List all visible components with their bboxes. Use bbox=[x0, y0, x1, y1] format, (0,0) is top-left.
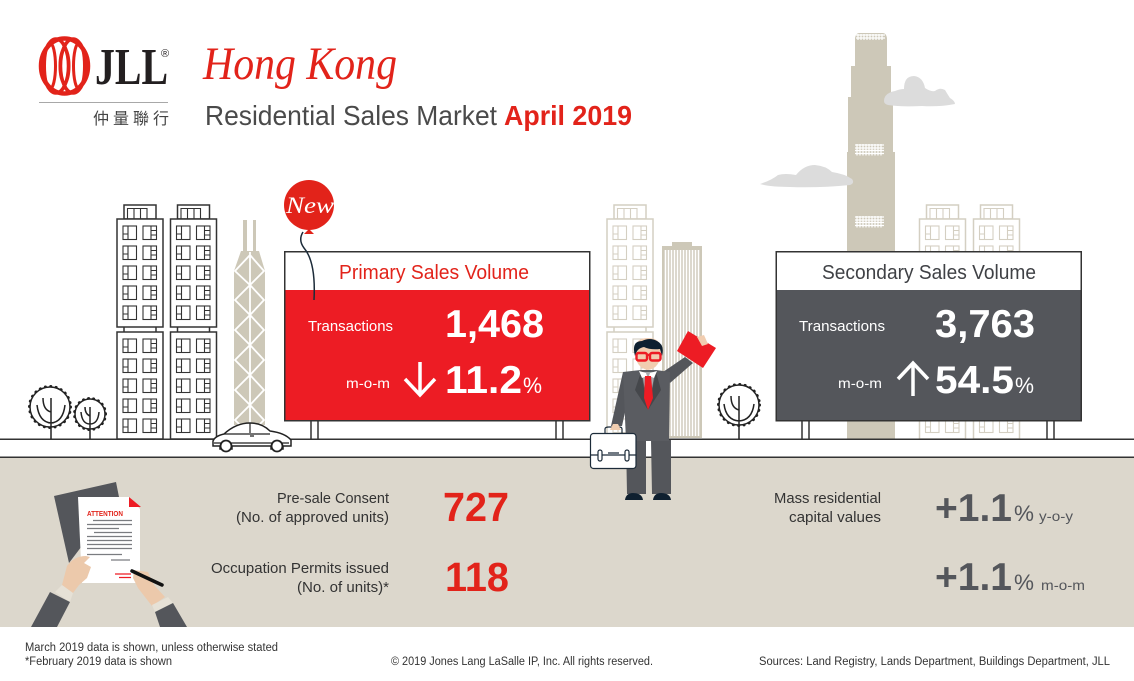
logo mark bbox=[41, 38, 88, 94]
arrow up bbox=[898, 363, 928, 396]
dark folder bbox=[54, 482, 119, 563]
balloon string bbox=[301, 232, 314, 300]
billboard posts bbox=[802, 421, 1054, 439]
tie bbox=[644, 376, 653, 410]
footer notes: March 2019 data is shown, unless otherwise stated bbox=[25, 642, 278, 654]
shirt bbox=[642, 372, 655, 410]
collar bbox=[639, 371, 657, 378]
logo wordmark: JLL bbox=[95, 39, 168, 96]
secondary heading: Secondary Sales Volume bbox=[822, 262, 1036, 284]
stat: pre-sale consent: Pre-sale Consent bbox=[277, 490, 390, 507]
primary transactions value: 1,468 bbox=[445, 303, 544, 346]
beige buildings behind the man bbox=[607, 205, 702, 439]
signature bbox=[115, 574, 131, 578]
stat: month on month capital values: m-o-m bbox=[1041, 577, 1085, 593]
sources: Sources: Land Registry, Lands Department, Buildings Department, JLL bbox=[759, 656, 1111, 668]
lapels bbox=[635, 372, 661, 410]
raised hand bbox=[697, 335, 708, 346]
illustration: signing document bbox=[31, 482, 187, 627]
footer bbox=[25, 642, 1111, 668]
bank of china tower bbox=[234, 220, 265, 428]
attention heading: ATTENTION bbox=[87, 511, 123, 518]
subtitle: April 2019 bbox=[504, 100, 632, 131]
trees bbox=[30, 384, 760, 439]
foreground apartment buildings bbox=[117, 205, 216, 439]
icon: new balloon bbox=[284, 180, 335, 300]
secondary m-o-m value: 54.5 bbox=[935, 359, 1014, 402]
beige apartment tower bbox=[607, 205, 653, 439]
cloud lower bbox=[760, 165, 853, 187]
stat: mass residential capital values: capital values bbox=[789, 509, 881, 526]
stat: pre-sale consent: (No. of approved units) bbox=[236, 509, 389, 526]
logo chinese name: 仲量聯行 bbox=[93, 110, 169, 128]
stat: pre-sale consent bbox=[236, 484, 509, 530]
stat: occupation permits bbox=[211, 554, 509, 600]
billboard posts bbox=[311, 421, 563, 439]
buildings behind secondary board bbox=[920, 205, 1020, 439]
primary transactions label: Transactions bbox=[308, 318, 393, 335]
subtitle: Residential Sales Market bbox=[205, 100, 497, 131]
copyright: © 2019 Jones Lang LaSalle IP, Inc. All rights reserved. bbox=[391, 656, 653, 668]
left sleeve bbox=[31, 592, 70, 627]
percent sign: % bbox=[1015, 373, 1034, 398]
secondary m-o-m label: m-o-m bbox=[838, 375, 882, 391]
head bbox=[635, 338, 661, 370]
percent sign: % bbox=[523, 373, 542, 398]
left arm bbox=[611, 372, 633, 426]
stat: mass residential capital values bbox=[774, 487, 1073, 530]
cloud upper bbox=[884, 76, 955, 106]
secondary transactions value: 3,763 bbox=[935, 303, 1035, 346]
jacket bbox=[623, 370, 670, 441]
ground band bbox=[0, 457, 1134, 627]
icon: car bbox=[213, 423, 291, 452]
raised folder bbox=[677, 331, 716, 368]
tree right bbox=[718, 384, 760, 439]
tree large left bbox=[30, 386, 70, 439]
title: Hong Kong: Hong Kong bbox=[202, 38, 397, 90]
document text lines bbox=[87, 520, 132, 560]
registered mark: ® bbox=[161, 48, 169, 60]
raised arm bbox=[663, 357, 693, 383]
primary m-o-m value: 11.2 bbox=[445, 359, 522, 402]
footer notes: *February 2019 data is shown bbox=[25, 656, 172, 668]
stat: mass residential capital values: % bbox=[1014, 501, 1034, 526]
ground lines bbox=[0, 438, 1134, 458]
logo: JLL bbox=[39, 38, 169, 128]
left hand bbox=[62, 556, 91, 593]
glasses bbox=[636, 353, 660, 360]
briefcase bbox=[590, 424, 636, 468]
stat: pre-sale consent: 727 bbox=[443, 484, 509, 530]
left cuff bbox=[55, 585, 73, 602]
clouds bbox=[760, 76, 955, 187]
hair bbox=[634, 339, 663, 356]
striped tower bbox=[662, 242, 702, 438]
footer notes bbox=[25, 642, 278, 668]
balloon body bbox=[284, 180, 334, 230]
paper bbox=[78, 497, 140, 583]
stat: month on month capital values bbox=[935, 556, 1085, 599]
stat: mass residential capital values: y-o-y bbox=[1039, 508, 1073, 524]
stat: month on month capital values: +1.1 bbox=[935, 556, 1012, 599]
right cuff bbox=[152, 597, 173, 612]
panel: secondary sales volume bbox=[776, 252, 1081, 439]
legs bbox=[626, 440, 671, 494]
stat: mass residential capital values: +1.1 bbox=[935, 487, 1012, 530]
background tower: two IFC bbox=[847, 33, 895, 439]
primary m-o-m label: m-o-m bbox=[346, 375, 390, 391]
secondary transactions label: Transactions bbox=[799, 318, 885, 335]
right hand bbox=[133, 570, 165, 606]
primary heading: Primary Sales Volume bbox=[339, 262, 529, 284]
illustration: businessman bbox=[590, 331, 716, 500]
tree small left bbox=[74, 398, 106, 439]
paper corner bbox=[129, 497, 141, 507]
pen bbox=[132, 571, 162, 585]
stat: occupation permits: (No. of units)* bbox=[297, 579, 389, 596]
right sleeve bbox=[155, 603, 187, 627]
stat: occupation permits: 118 bbox=[445, 554, 509, 600]
shoes bbox=[625, 493, 671, 500]
balloon label: New bbox=[285, 193, 335, 218]
panel: primary sales volume bbox=[285, 252, 590, 439]
stat: occupation permits: Occupation Permits issued bbox=[211, 560, 389, 577]
arrow down bbox=[405, 362, 435, 395]
stat: month on month capital values: % bbox=[1014, 570, 1034, 595]
stat: mass residential capital values: Mass residential bbox=[774, 490, 881, 507]
